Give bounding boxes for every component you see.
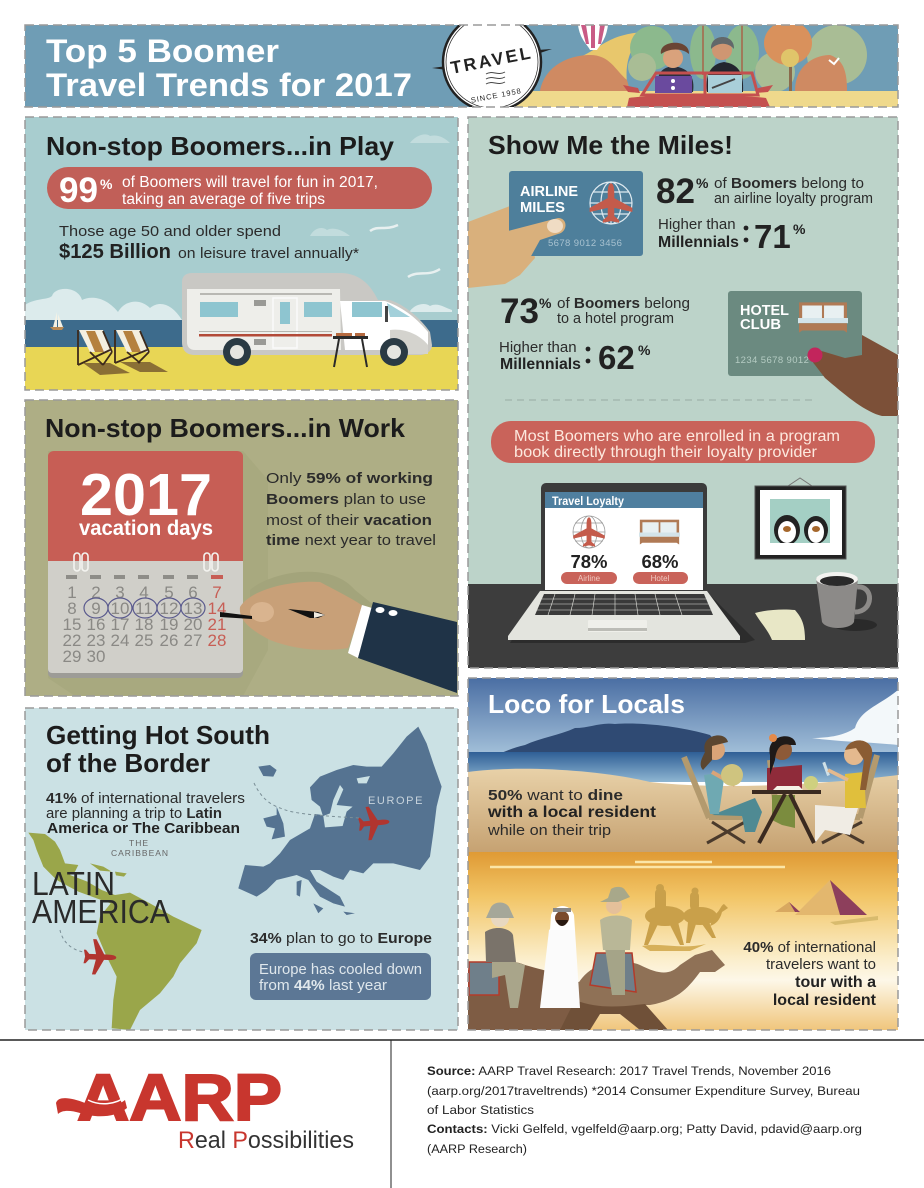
text: 59 percent: time next year to travel [266,532,436,549]
callout: loyalty booking: Most Boomers who are enrolled in a program [514,428,840,445]
text: 40 percent: 40% of international [743,939,876,956]
source and contacts: of Labor Statistics [427,1103,534,1117]
title: Travel Trends for 2017 [46,67,412,103]
text: 41 percent: are planning a trip to Latin [46,805,222,822]
text: spending: on leisure travel annually* [178,245,359,262]
stat: 73 percent hotel: of Boomers belong [557,295,690,312]
label: Latin America [32,865,170,930]
calendar: 23 [87,631,105,650]
stat: 73 percent hotel: Higher than [499,339,577,356]
airline card with hand: 5678 9012 3456 [548,238,622,249]
stat: 82 percent airline: 82 [656,172,695,211]
stat: 73 percent hotel: 62 [598,339,635,376]
beach scene [468,678,898,1030]
calendar: 19 [160,615,178,634]
calendar: 26 [160,631,178,650]
source and contacts: (aarp.org/2017traveltrends) *2014 Consumer Expenditure Survey, Bureau [427,1084,860,1098]
hotel card with hand [728,291,898,416]
text: 34 percent Europe: 34% plan to go to Europe [250,930,432,947]
desk [468,584,898,668]
mouse [755,609,805,640]
callout: 99 percent: % [100,176,113,192]
label: The Caribbean: THE [129,838,149,848]
stat: 82 percent airline: Millennials [658,234,739,251]
calendar: 17 [111,615,129,634]
camel riders [468,887,725,1030]
callout: 99 percent: 99 [59,171,98,210]
calendar: 11 [135,599,153,618]
stat: 82 percent airline: % [696,175,709,191]
picnic table [333,333,368,367]
map: Europe: EUROPE [368,795,424,807]
text: 50 percent: while on their trip [487,822,611,839]
source and contacts: Contacts: Vicki Gelfeld, vgelfeld@aarp.org; Patty David, pdavid@aarp.org [427,1122,862,1136]
calendar: 7 [212,583,222,602]
badge: Travel since 1958: SINCE 1958 [470,86,523,105]
calendar: 27 [184,631,202,650]
callout: Europe cooled [250,953,431,1000]
callout: loyalty booking: book directly through their loyalty provider [514,444,818,461]
beach scene [25,134,458,390]
stat: 73 percent hotel: % [539,295,552,311]
calendar: 29 [63,647,81,666]
AARP logo: Real Possibilities [178,1127,354,1154]
badge: Travel since 1958: TRAVEL [449,42,534,78]
hand with pen [220,572,457,693]
stat: 82 percent airline: 71 [754,218,791,255]
callout: loyalty booking [491,421,875,463]
panel: Getting Hot South of the Border [25,708,458,1030]
calendar: 20 [184,615,202,634]
calendar: 28 [208,631,226,650]
calendar: 25 [135,631,153,650]
callout: 99 percent: of Boomers will travel for fun in 2017, [122,174,378,191]
airline card with hand: AIRLINE [520,184,578,200]
callout: 99 percent: taking an average of five trips [122,191,325,208]
label: The Caribbean: CARIBBEAN [111,848,169,858]
calendar: 8 [67,599,77,618]
source and contacts: Source: AARP Travel Research: 2017 Travel Trends, November 2016 [427,1064,831,1078]
calendar: 13 [184,599,202,618]
laptop: 78% [570,551,608,572]
heading: Show Me the Miles! [488,130,733,160]
calendar: 14 [208,599,226,618]
desert scene [468,852,898,1030]
laptop: 68% [641,551,679,572]
title: Top 5 Boomer [46,33,279,69]
text: 50 percent: 50% want to dine [488,787,623,804]
hotel card with hand: HOTEL [740,303,789,319]
header banner [24,24,899,108]
label: Latin America: LATIN [32,865,115,902]
AARP logo [56,1060,354,1154]
motorhome [182,273,432,366]
heading: Non-stop Boomers...in Work [45,413,406,443]
header illustration: couple driving through landscape [515,21,898,107]
callout: 99 percent [47,167,432,210]
stat: 73 percent hotel: 73 [500,292,539,331]
calendar: 15 [63,615,81,634]
heading: Non-stop Boomers...in Play [46,131,395,161]
text: 40 percent: travelers want to [766,956,876,973]
stat: 73 percent hotel: Millennials [500,356,581,373]
source and contacts [427,1064,862,1156]
stat: 82 percent airline: an airline loyalty program [714,190,873,207]
hotel card with hand: 1234 5678 9012 [735,355,809,366]
map: Latin America [28,833,202,1030]
text: spending [59,223,359,263]
airline card with hand [468,171,643,288]
panel: Non-stop Boomers in Play [25,117,458,390]
calendar: 2 [91,583,101,602]
text: 40 percent: tour with a [795,974,876,991]
text: spending: $125 Billion [59,241,171,263]
AARP logo: AARP [77,1060,282,1134]
calendar: 24 [111,631,129,650]
text: 41 percent: 41% of international travelers [46,790,245,807]
panel: Non-stop Boomers in Work [25,400,458,696]
calendar: 30 [87,647,105,666]
flight paths [60,783,360,952]
stat: 82 percent airline [656,172,873,255]
text: 59 percent: most of their vacation [266,512,432,529]
calendar: 2017 [80,462,212,528]
calendar: 6 [188,583,198,602]
calendar: 5 [164,583,174,602]
calendar: 22 [63,631,81,650]
text: 59 percent [266,470,436,549]
calendar: 4 [139,583,149,602]
label: The Caribbean [111,838,169,858]
framed penguin picture [755,478,846,559]
beach diners [684,734,877,843]
text: spending: Those age 50 and older spend [59,223,281,240]
badge: Travel since 1958 [432,25,552,107]
text: 41 percent: America or The Caribbean [47,821,240,837]
calendar [48,451,243,678]
stat: 73 percent hotel: % [638,342,651,358]
airline card with hand: MILES [520,200,565,216]
heading: of the Border [46,748,210,778]
heading: Getting Hot South [46,720,270,750]
laptop: Airline [578,574,601,583]
calendar: 12 [160,599,178,618]
laptop: Travel Loyalty [552,496,625,508]
text: 50 percent: with a local resident [487,804,657,821]
calendar: 9 [91,599,101,618]
calendar: 10 [111,599,129,618]
coffee mug [816,572,877,631]
panel: Loco for Locals [468,678,898,1030]
stat: 73 percent hotel [499,292,690,376]
laptop [508,483,755,643]
heading: Loco for Locals [488,689,685,719]
calendar: 16 [87,615,105,634]
callout: Europe cooled: Europe has cooled down [259,962,422,978]
calendar: 3 [115,583,125,602]
panel: Show Me the Miles [468,117,898,668]
label: Latin America: AMERICA [32,893,170,930]
text: 41 percent [46,790,245,837]
stat: 73 percent hotel: to a hotel program [557,310,674,327]
text: 59 percent: Only 59% of working [266,470,433,487]
laptop: Hotel [651,574,670,583]
map: Europe [238,727,442,915]
deck chairs [78,330,168,375]
heading [46,720,270,778]
callout: Europe cooled: from 44% last year [259,978,387,994]
source and contacts: (AARP Research) [427,1142,527,1156]
hotel card with hand: CLUB [740,317,781,333]
text: 40 percent: local resident [773,992,877,1009]
text: 59 percent: Boomers plan to use [266,491,426,508]
title [46,33,412,103]
footer [0,1040,924,1188]
calendar: vacation days [79,517,213,540]
calendar: 21 [208,615,226,634]
stat: 82 percent airline: of Boomers belong to [714,175,864,192]
calendar: 1 [67,583,77,602]
text: 50 percent [487,787,657,839]
calendar: 18 [135,615,153,634]
stat: 82 percent airline: Higher than [658,216,736,233]
text: 40 percent [743,939,877,1009]
stat: 82 percent airline: % [793,221,806,237]
